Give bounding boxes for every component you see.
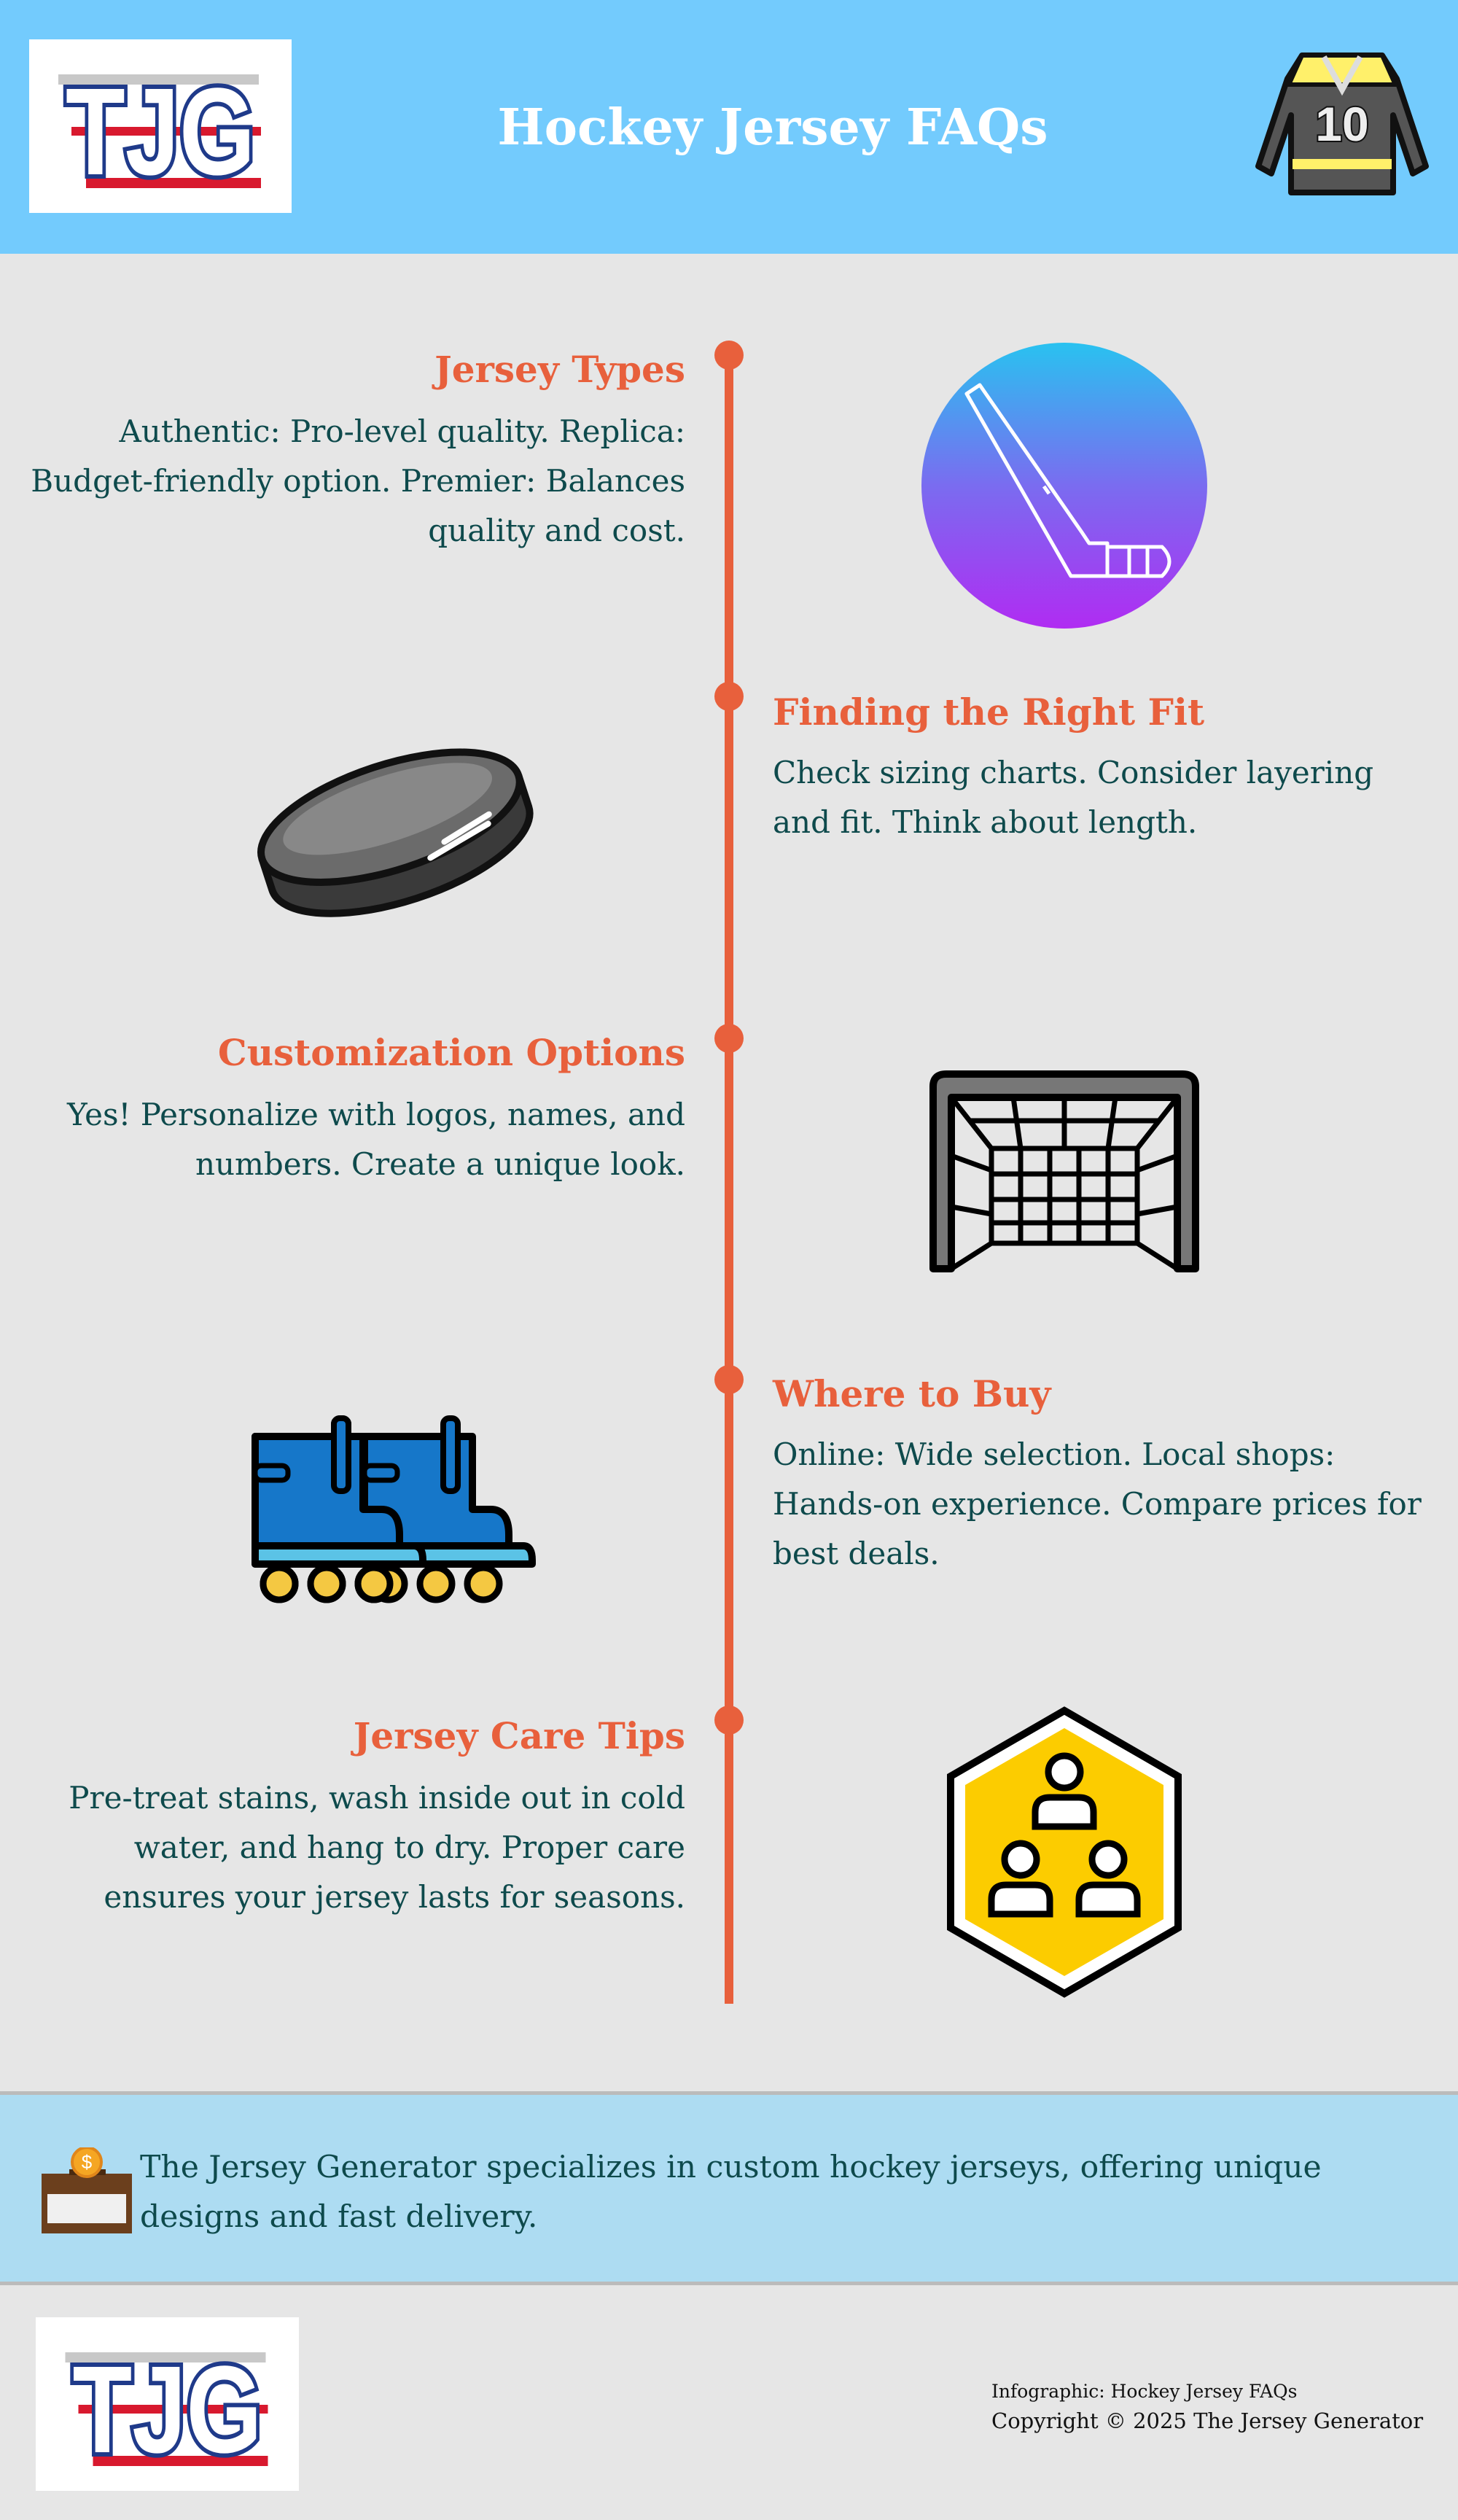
text block: Hands-on experience. Compare prices for (773, 1486, 1422, 1522)
footer text: Copyright © 2025 The Jersey Generator (991, 2408, 1423, 2433)
icon: donation box (42, 2147, 132, 2233)
text block (67, 1097, 685, 1182)
icon: hockey stick circle (921, 343, 1207, 629)
panel: Customization Options (67, 1031, 685, 1182)
icon: donation box: $ (82, 2151, 93, 2173)
text block (31, 413, 685, 548)
text block: and fit. Think about length. (773, 804, 1197, 840)
text block: Budget-friendly option. Premier: Balances (31, 463, 685, 499)
text block (773, 1436, 1422, 1571)
callout band (0, 2091, 1458, 2285)
text block: numbers. Create a unique look. (195, 1146, 685, 1182)
text block (69, 1780, 685, 1915)
text block: callout (140, 2150, 1322, 2235)
text block: water, and hang to dry. Proper care (134, 1829, 685, 1865)
text block: quality and cost. (428, 513, 685, 548)
text block: Authentic: Pro-level quality. Replica: (119, 413, 685, 449)
icon: jersey: 10 (1315, 97, 1369, 151)
panel: Jersey Care Tips (69, 1714, 685, 1915)
logo: header (29, 39, 292, 213)
text block: best deals. (773, 1536, 940, 1571)
heading: Customization Options (218, 1031, 685, 1074)
icon: team hexagon (947, 1706, 1182, 1998)
panel: Jersey Types (31, 348, 685, 548)
icon: jersey (1255, 52, 1429, 195)
title: Hockey Jersey FAQs (497, 98, 1048, 157)
icon: puck (257, 748, 534, 917)
panel: Where to Buy (773, 1372, 1422, 1571)
text block: callout: designs and fast delivery. (140, 2199, 537, 2235)
heading: Where to Buy (773, 1372, 1050, 1415)
text block: Yes! Personalize with logos, names, and (67, 1097, 685, 1132)
text block: Pre-treat stains, wash inside out in cold (69, 1780, 685, 1816)
heading: Jersey Types (434, 348, 685, 391)
footer text: Infographic: Hockey Jersey FAQs (991, 2381, 1298, 2402)
heading: Finding the Right Fit (773, 691, 1204, 734)
text block: Online: Wide selection. Local shops: (773, 1436, 1335, 1472)
icon: skates (252, 1415, 536, 1603)
footer (36, 2317, 1423, 2491)
text block: callout: The Jersey Generator specializes in custom hockey jerseys, offering unique (140, 2150, 1322, 2185)
logo: footer (36, 2317, 299, 2491)
icon: goal net (929, 1070, 1199, 1272)
text block: Check sizing charts. Consider layering (773, 755, 1373, 790)
text block (773, 755, 1373, 840)
heading: Jersey Care Tips (354, 1714, 685, 1757)
panel: Finding the Right Fit (773, 691, 1373, 840)
timeline line (725, 356, 733, 2004)
text block: ensures your jersey lasts for seasons. (104, 1879, 685, 1915)
footer text (991, 2381, 1423, 2433)
header band (0, 0, 1458, 254)
